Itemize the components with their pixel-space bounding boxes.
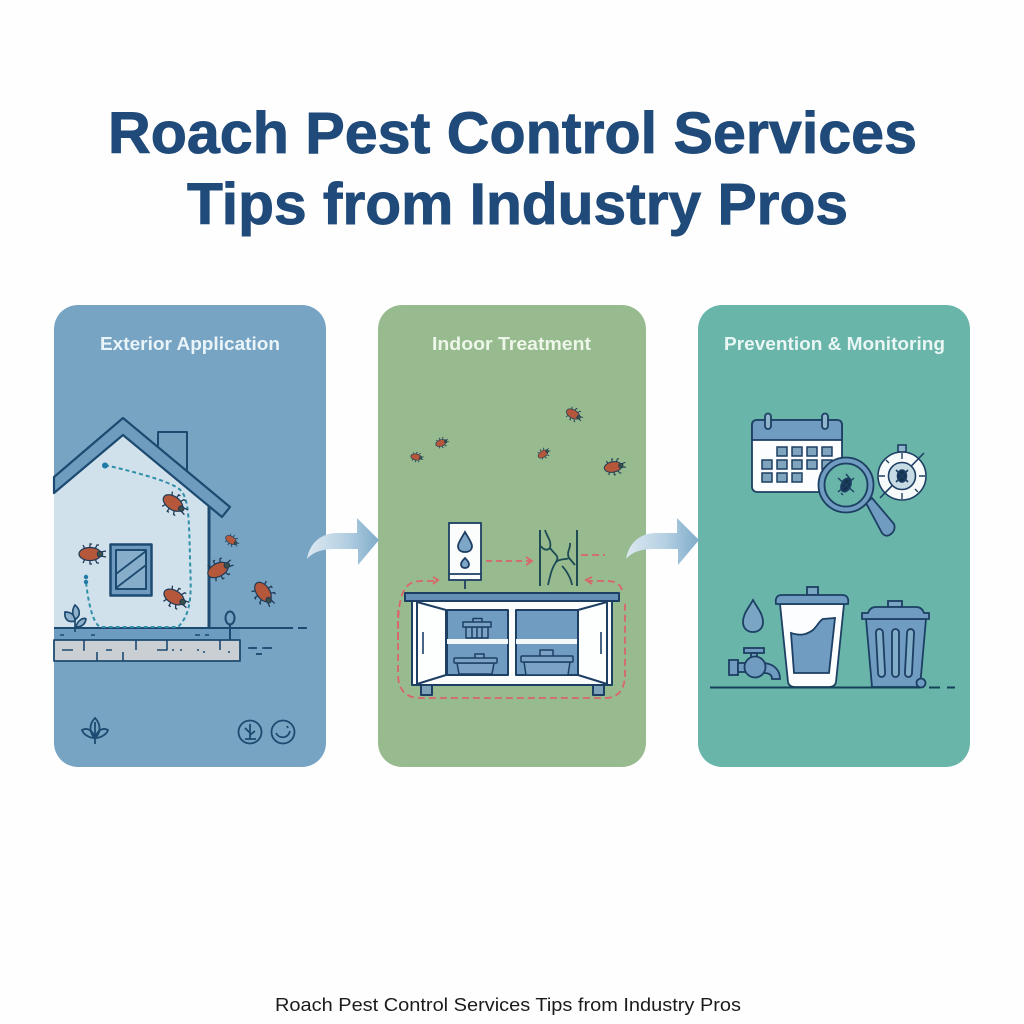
icon: trash can [862,601,929,688]
icon: circle plant badge [238,720,262,744]
icon: calendar [752,414,842,492]
icon: water drop [743,600,763,632]
heading: indoor treatment: Indoor Treatment [432,334,591,354]
red treatment arrows [398,555,625,698]
spray nozzles [84,462,108,584]
heading: exterior application: Exterior Application [100,334,280,354]
icon: leaf sprout [82,718,108,744]
panel: exterior application [54,305,326,767]
arrow: exterior to indoor [307,518,379,565]
cracked wall gap icon [540,530,577,586]
roach bugs on house [79,488,280,614]
icon: garden plant [65,605,86,632]
icon: magnifying glass with roach [818,458,895,536]
icon: water tap [729,648,780,679]
heading: prevention and monitoring: Prevention & Monitoring [724,334,945,354]
ground line [710,686,955,688]
icon: small tree [226,612,234,640]
caption: Roach Pest Control Services Tips from Industry Pros [275,995,741,1015]
title [108,101,917,237]
panel: prevention and monitoring [698,305,970,767]
icon: monitor gauge [878,445,926,500]
treatment path: dotted spray line [86,465,191,627]
panel: indoor treatment [378,305,646,767]
bait dispenser icon [449,523,481,589]
ground marks [249,648,272,654]
arrow: indoor to prevention [626,518,699,565]
cabinet [405,593,619,695]
house illustration [54,418,307,661]
title: Roach Pest Control Services [108,101,917,166]
roach bugs on wall [410,405,627,476]
icon: bucket with water [776,587,848,687]
icon: circle moon badge [272,720,294,744]
title: Tips from Industry Pros [187,172,848,237]
